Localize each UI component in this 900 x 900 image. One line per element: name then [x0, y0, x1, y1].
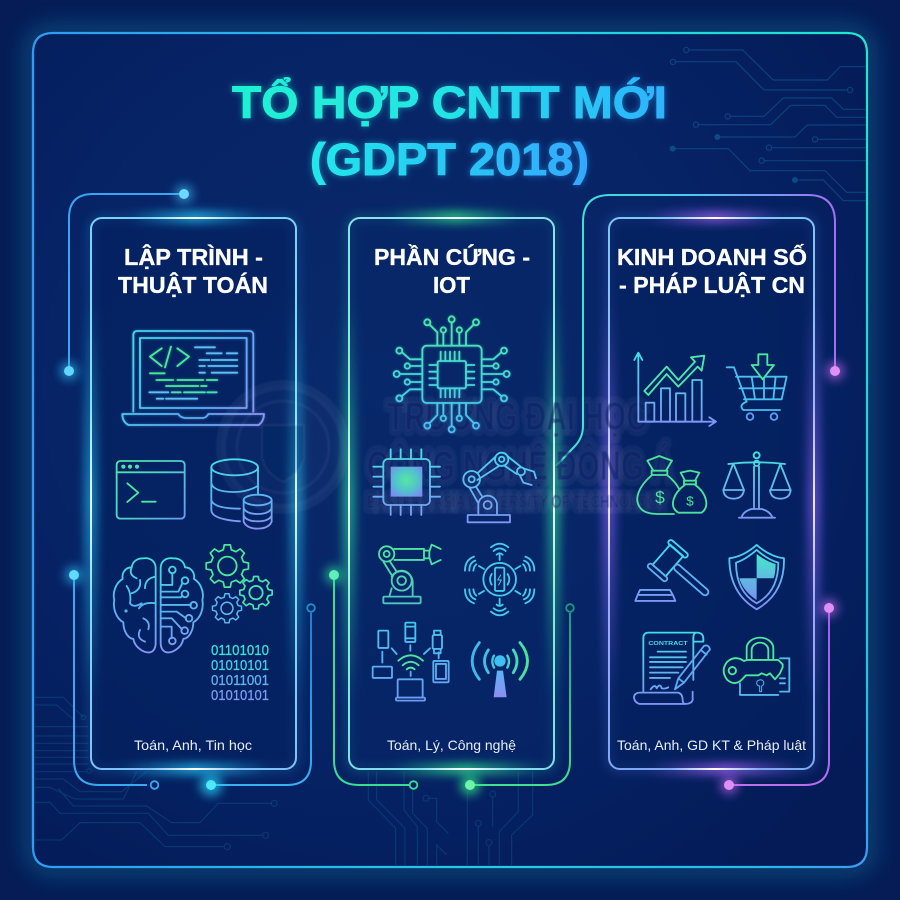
- icon: robot arm upper: [463, 453, 536, 522]
- watermark text: EASTERN ASIA UNIVERSITY OF TECHNOLOGY: [367, 492, 667, 512]
- circuit pattern: bottom middle: [368, 772, 533, 865]
- icon: money bags: [637, 456, 706, 514]
- connector: left column top: [60, 185, 193, 380]
- watermark: university logo and name: [221, 385, 673, 512]
- heading: KINH DOANH SỐ: [617, 243, 807, 270]
- icon: money bags: $: [686, 494, 694, 509]
- icon: microchip with circuit traces: [394, 316, 510, 432]
- icon: brain with circuits: [114, 558, 203, 652]
- binary digits: [211, 642, 269, 704]
- icon: antenna signal: [472, 643, 527, 697]
- circuit pattern: top right: [670, 47, 866, 201]
- panel frame: [343, 212, 560, 774]
- connector: left column bottom left: [65, 566, 158, 789]
- heading: THUẬT TOÁN: [118, 271, 268, 298]
- watermark text: TRƯỜNG ĐẠI HỌC: [387, 393, 647, 439]
- title: (GDPT 2018): [310, 134, 589, 185]
- title: [232, 77, 667, 185]
- icon: wireless phone charging: [465, 544, 534, 615]
- icon: shopping cart: [727, 354, 787, 420]
- panel frame: [603, 212, 820, 774]
- icon: database: [211, 459, 272, 529]
- heading: [118, 243, 268, 298]
- connector: left column bottom right: [200, 604, 315, 796]
- icon: connected devices: [373, 623, 449, 701]
- heading: IOT: [433, 272, 471, 298]
- icon: contract document: CONTRACT: [648, 641, 688, 647]
- binary digits: 01010101: [211, 657, 269, 674]
- binary digits: 01010101: [211, 687, 269, 704]
- icon: robot arm lower: [379, 545, 441, 603]
- icon: processor: [373, 449, 440, 515]
- binary digits: 01101010: [211, 642, 269, 659]
- icon: contract document: [634, 633, 710, 704]
- watermark seal: [221, 385, 345, 509]
- connector: right column bottom: [720, 599, 838, 794]
- heading: - PHÁP LUẬT CN: [619, 271, 805, 298]
- icon: money bags: $: [655, 487, 665, 507]
- panel: Phần cứng - IoT: [343, 212, 560, 774]
- icon: key and lock: [724, 638, 789, 695]
- icon: gavel: [635, 539, 719, 608]
- connector: middle column bottom left: [325, 566, 417, 789]
- icon: scales of justice: [723, 452, 791, 518]
- heading: PHẦN CỨNG -: [374, 243, 530, 270]
- panel frame: [85, 212, 302, 774]
- title: TỔ HỢP CNTT MỚI: [232, 77, 667, 128]
- icon: gears: [206, 545, 272, 623]
- subject line: column 1: Toán, Anh, Tin học: [134, 737, 252, 753]
- watermark text: [367, 393, 673, 512]
- icon: laptop with code: [122, 331, 264, 425]
- heading: [617, 243, 807, 298]
- panel: Kinh doanh số - Pháp luật CN: [603, 212, 820, 774]
- watermark text: CÔNG NGHỆ ĐÔNG Á: [367, 441, 673, 489]
- binary digits: 01011001: [211, 672, 269, 689]
- icon: security shield: [729, 545, 784, 609]
- subject line: column 3: Toán, Anh, GD KT & Pháp luật: [617, 737, 806, 753]
- connector: right column top: [556, 195, 844, 466]
- icon: terminal window: [117, 461, 185, 519]
- icon: growth chart: [634, 353, 716, 426]
- subject line: column 2: Toán, Lý, Công nghệ: [387, 737, 516, 753]
- heading: LẬP TRÌNH -: [124, 243, 263, 270]
- panel: Lập trình - Thuật toán: [85, 212, 302, 774]
- heading: [374, 243, 530, 298]
- circuit pattern: bottom left: [35, 697, 277, 850]
- connector: middle column bottom right: [460, 604, 574, 795]
